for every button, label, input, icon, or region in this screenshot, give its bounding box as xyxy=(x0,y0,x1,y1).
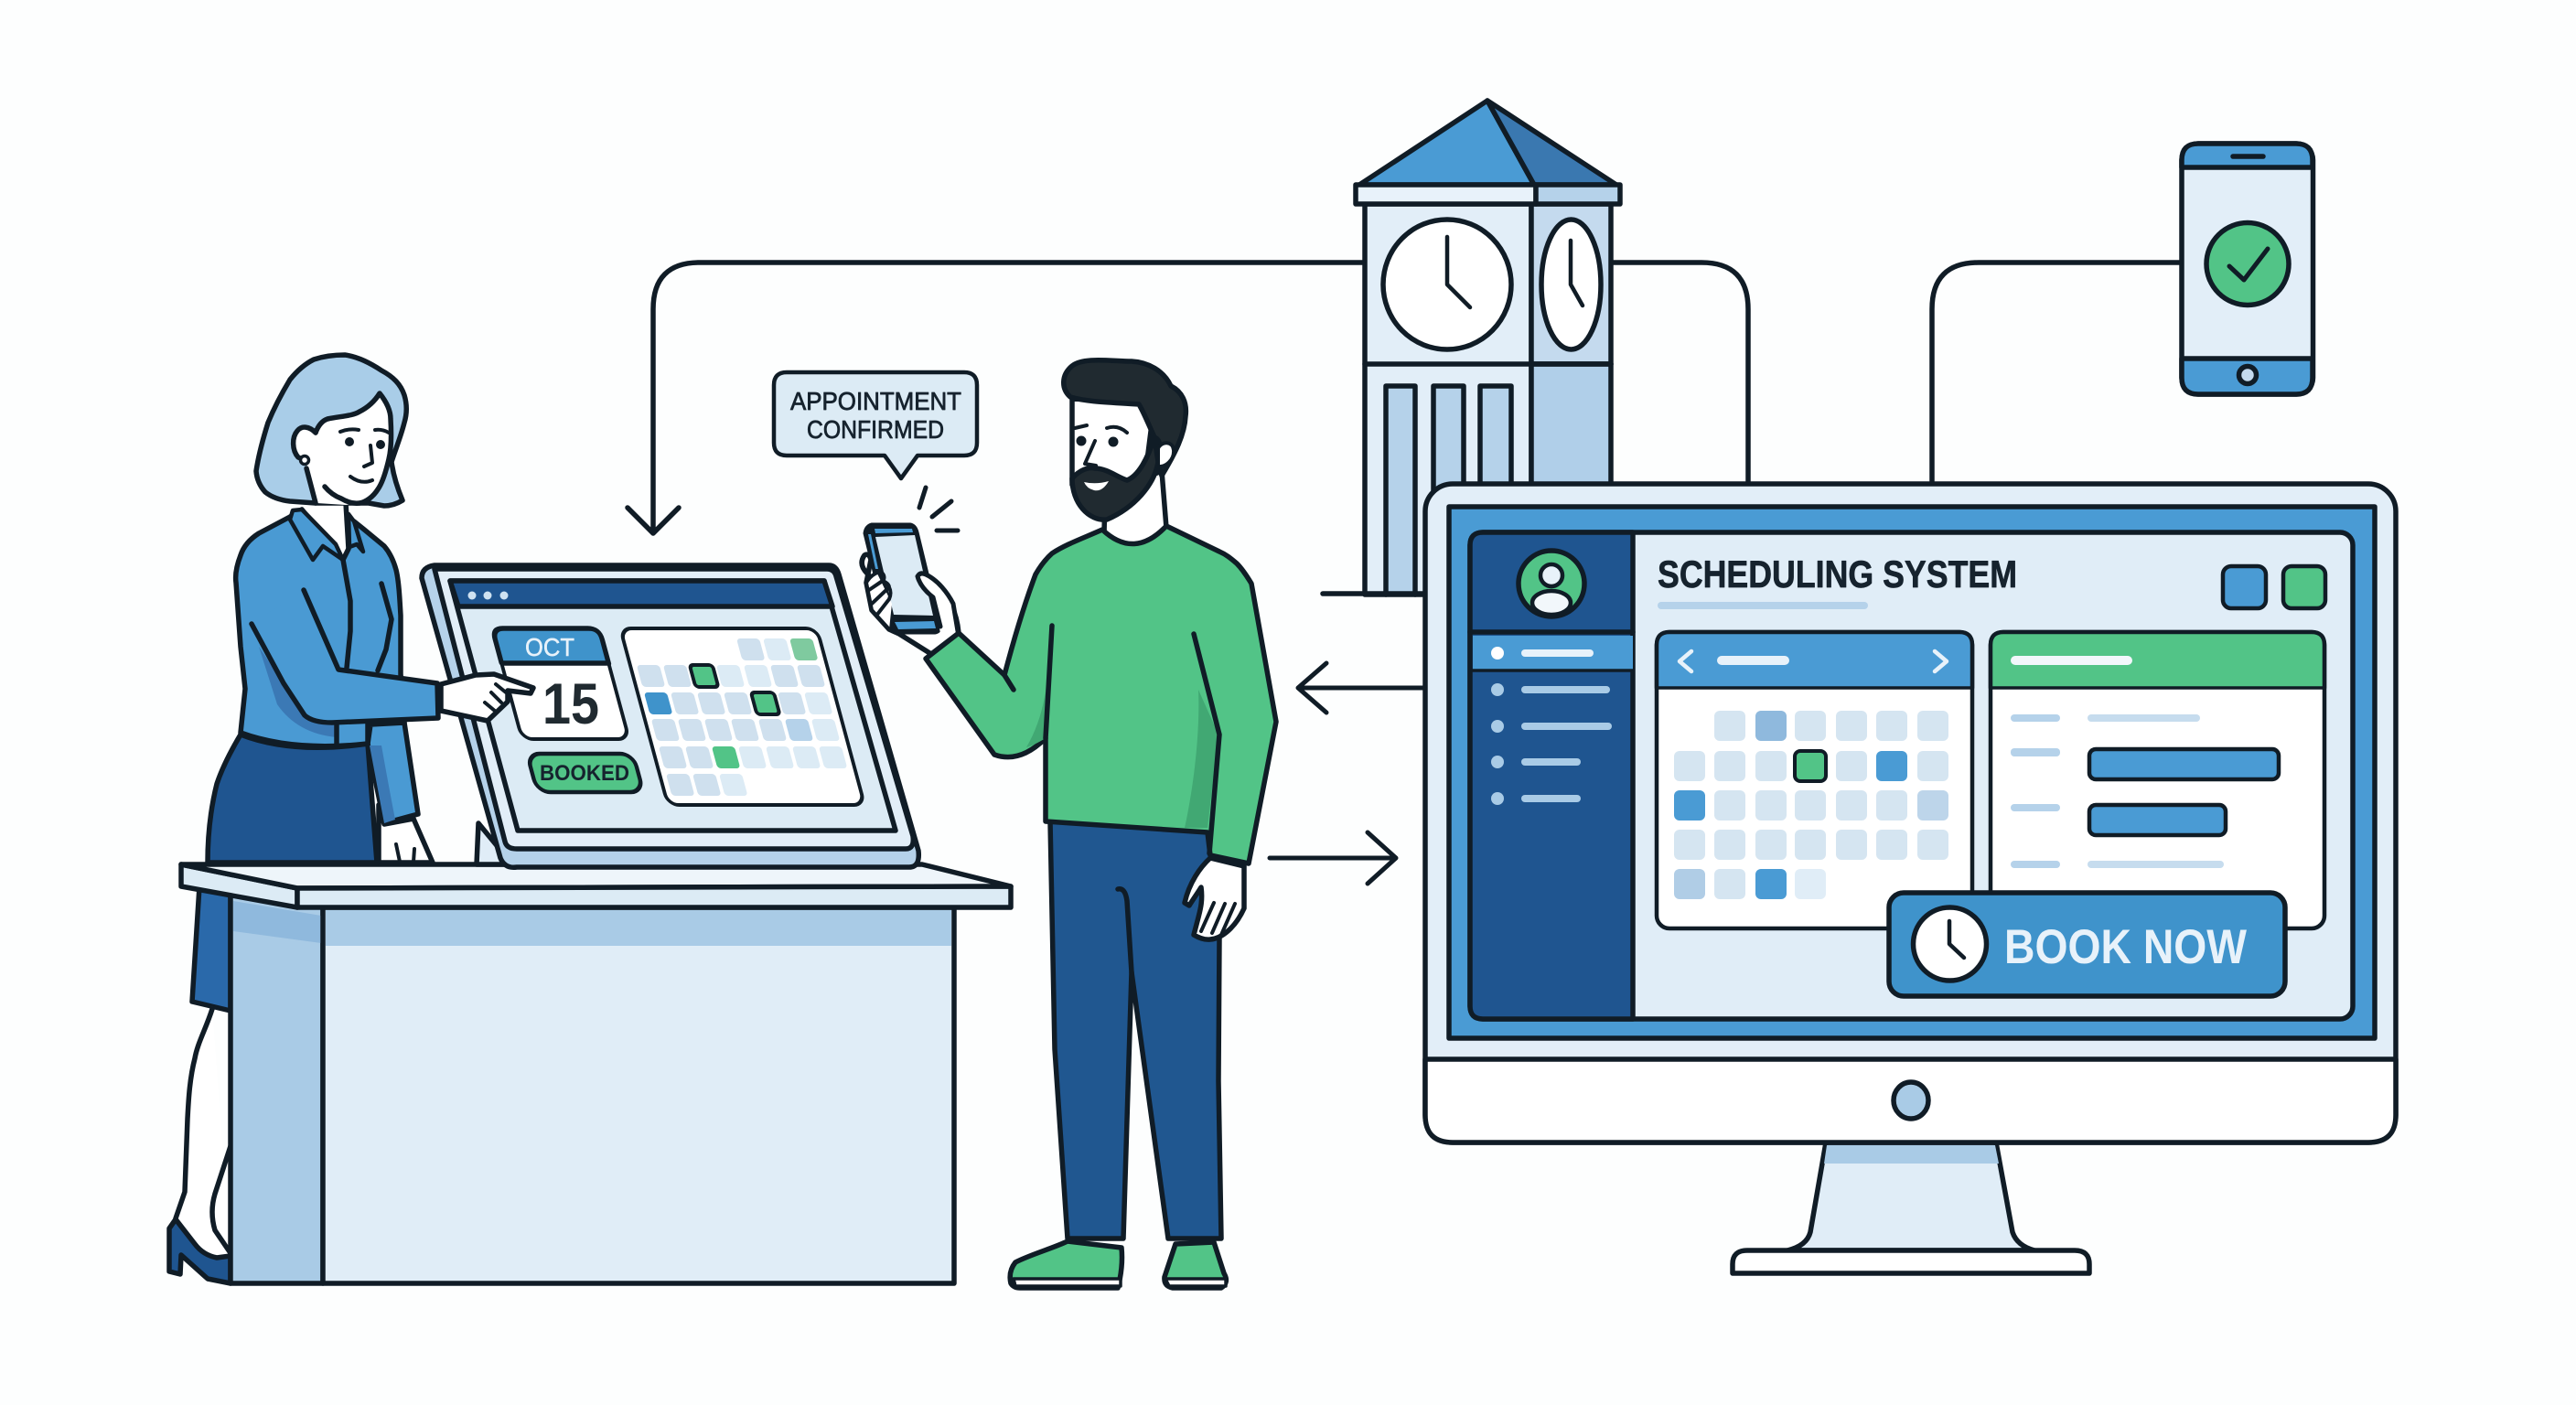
arrow: tower to kiosk connector xyxy=(628,263,1365,533)
screen xyxy=(1449,507,2375,1038)
calendar grid panel xyxy=(620,628,864,805)
callout: appointment confirmed xyxy=(774,372,977,478)
eyes, brows and nose xyxy=(1075,425,1127,466)
panel: tablet kiosk xyxy=(422,565,918,867)
right shoe xyxy=(1165,1242,1226,1288)
facial features xyxy=(340,429,389,482)
icon: smartphone with check mark xyxy=(2182,144,2313,394)
panel: desktop monitor xyxy=(1425,484,2396,1273)
date card: OCT xyxy=(525,633,574,661)
tablet screen xyxy=(450,581,896,831)
hair xyxy=(1064,360,1186,476)
panel: reception desk xyxy=(181,864,1011,1283)
power button xyxy=(1894,1082,1928,1119)
fingers and thumb xyxy=(866,572,892,629)
neck xyxy=(1104,471,1166,545)
left shoe xyxy=(1010,1241,1122,1288)
arrow: monitor to customer xyxy=(1298,663,1424,713)
pointing hand xyxy=(441,674,533,721)
woman: upper body xyxy=(208,355,533,863)
calendar cells xyxy=(1674,711,1948,899)
face xyxy=(1072,399,1154,489)
hanging sleeve xyxy=(368,723,418,823)
icon: clock tower xyxy=(1323,101,1620,595)
beard xyxy=(1072,437,1158,520)
button: book now xyxy=(1889,893,2285,996)
avatar xyxy=(1519,551,1584,617)
callout: appointment confirmed: APPOINTMENT xyxy=(790,387,961,415)
phone in hand xyxy=(864,524,940,633)
man: customer xyxy=(862,360,1276,1288)
ear xyxy=(1158,443,1174,467)
date card: 15 xyxy=(542,672,599,736)
monitor body xyxy=(1425,484,2396,1142)
blouse shade xyxy=(259,647,337,737)
hair xyxy=(256,355,406,506)
booked badge xyxy=(527,754,643,792)
panel: month calendar xyxy=(1657,632,1972,928)
neck xyxy=(302,499,349,560)
left collar xyxy=(290,509,343,560)
sidebar xyxy=(1470,532,1633,1019)
blouse xyxy=(236,509,404,746)
blouse front lines xyxy=(337,560,392,745)
arrow: customer to monitor xyxy=(1270,832,1396,884)
woman: legs behind the desk xyxy=(169,886,231,1283)
mouth xyxy=(1084,481,1109,490)
ear and earring xyxy=(294,427,316,461)
tablet frame xyxy=(422,565,918,867)
callout: appointment confirmed: CONFIRMED xyxy=(807,415,944,444)
heading underline xyxy=(1658,602,1868,609)
skirt xyxy=(208,735,377,863)
sweater fold lines xyxy=(1004,626,1219,853)
button: book now: BOOK NOW xyxy=(2004,920,2247,974)
panel: appointment details xyxy=(1991,632,2324,928)
date card xyxy=(492,628,629,739)
hand behind phone xyxy=(862,554,959,654)
trousers xyxy=(1050,821,1221,1239)
heading: scheduling system: SCHEDULING SYSTEM xyxy=(1658,552,2017,595)
pointing sleeve xyxy=(252,590,438,723)
menu items xyxy=(1491,647,1612,805)
tablet stand xyxy=(477,823,512,864)
booked badge: BOOKED xyxy=(540,761,629,786)
right collar xyxy=(349,514,363,552)
connector: phone to monitor xyxy=(1932,263,2182,481)
sweater shade xyxy=(1026,677,1218,828)
monitor stand xyxy=(1733,1142,2089,1273)
hand on the desk xyxy=(379,805,433,863)
sweater xyxy=(926,526,1276,863)
header buttons xyxy=(2223,566,2325,608)
signal lines from phone xyxy=(919,488,958,531)
face xyxy=(306,393,392,505)
right hand xyxy=(1185,858,1244,939)
connector: tower to monitor xyxy=(1611,263,1748,481)
